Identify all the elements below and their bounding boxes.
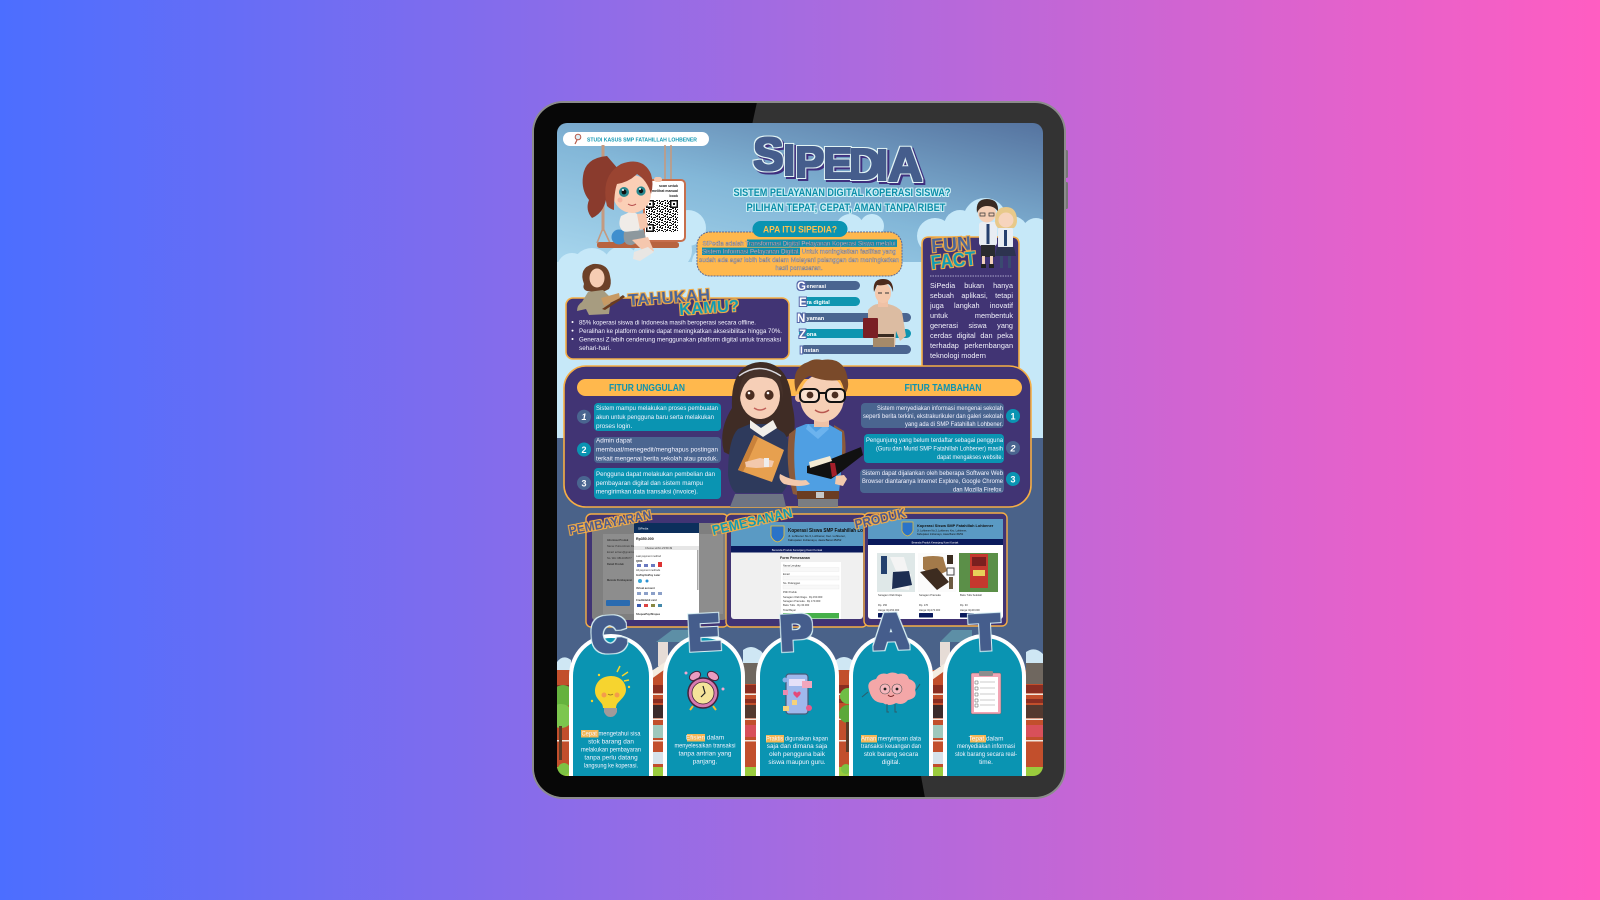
bullet list: Peralihan ke platform online dapat meningkatkan aksesibilitas hingga 70%. — [579, 328, 782, 335]
left feature 2: membuat/menegedit/menghapus postingan — [596, 446, 718, 453]
panel: apa itu sipedia: hasil pemasaran. — [775, 265, 823, 272]
title: SiPedia: S — [753, 128, 784, 180]
right feature 3: 3 — [1010, 474, 1016, 484]
list: GENZI bars: ra digital — [806, 300, 830, 306]
product: buku tulis: Harga: Rp30.000 — [960, 608, 980, 612]
payment modal — [634, 523, 699, 620]
panel: fun fact — [922, 199, 1019, 372]
screenshot panel: pemesanan: Buku Tulis · Rp 30.000 — [783, 603, 810, 607]
icon: alarm clock — [684, 670, 724, 710]
product: buku tulis: Rp. 30 — [960, 603, 968, 607]
illustration: girl on swing with QR board: scan untuk — [659, 184, 678, 188]
card text: digital. — [882, 759, 900, 766]
letter T: T — [969, 606, 1001, 661]
payment modal: Virtual account — [636, 586, 655, 590]
card text: Efisien dalam — [686, 734, 724, 742]
card text: tanpa perlu datang — [584, 754, 638, 762]
product: seragam pramuka: Seragam Pramuka — [919, 593, 941, 597]
screenshot panel: pembayaran: Email: azzam@gmail.com — [607, 550, 637, 554]
left feature 3: pembayaran digital dan sistem mampu — [596, 480, 703, 487]
product: seragam pramuka: Harga: Rp170.000 — [919, 608, 941, 612]
title: SiPedia: D — [849, 140, 881, 189]
product: seragam olah raga: Rp. 150 — [878, 603, 888, 607]
card text: time. — [979, 759, 993, 766]
card text: stok barang secara real- — [955, 751, 1017, 758]
card text — [581, 730, 641, 770]
subtitle: PILIHAN TEPAT, CEPAT, AMAN TANPA RIBET — [746, 202, 946, 214]
card text: Praktis digunakan kapan — [766, 736, 828, 742]
left feature 1 — [577, 403, 721, 431]
right feature 1: yang ada di SMP Fatahillah Lohbener. — [905, 421, 1003, 428]
left feature 2: terkait mengenai berita sekolah atau produk. — [596, 455, 718, 462]
right feature 3: dan Mozilla Firefox. — [953, 486, 1003, 493]
screenshot panel: produk: Jl. Lohbener No.3, Lohbener, Kec. Lohbener, — [917, 530, 967, 532]
body text: untuk membentuk — [930, 310, 1013, 320]
logo — [771, 526, 784, 542]
card text: menyediakan informasi — [957, 743, 1015, 750]
screenshot panel: pembayaran: Nama: Putra Azzam Raihan — [607, 544, 640, 548]
right feature 2: (Guru dan Murid SMP Fatahillah Lohbener) masih — [876, 445, 1003, 452]
badge: studi kasus: STUDI KASUS SMP FATAHILLAH LOHBENER — [587, 137, 697, 143]
panel: apa itu sipedia: sudah ada agar lebih baik dalam Melayani pelanggan dan meningkatkan — [699, 257, 900, 264]
bullet list: 85% koperasi siswa di Indonesia masih beroperasi secara offline. — [579, 319, 756, 326]
panel: tahukah kamu — [566, 264, 789, 359]
poster screen — [549, 123, 1050, 790]
heading bar — [577, 379, 1022, 396]
right feature 3: Browser diantaranya Internet Explore, Google Chrome — [862, 478, 1003, 485]
screenshot panel: pemesanan: Jl. Lohbener No.3, Lohbener, Kec. Lohbener, — [788, 534, 846, 538]
illustration: two students — [977, 199, 1017, 268]
list: GENZI bars: nstan — [804, 348, 820, 354]
card text: stok barang secara — [864, 751, 919, 758]
card text — [766, 735, 828, 766]
label: produk: PRODUK — [853, 505, 908, 532]
screenshot panel: pemesanan: Form Pemesanan — [780, 556, 810, 560]
card text — [861, 735, 921, 766]
screenshot panel: pemesanan: Email — [783, 572, 790, 576]
heading: tahukah kamu — [626, 288, 740, 316]
screenshot panel: pemesanan: Total Bayar — [783, 608, 796, 612]
screenshot panel: produk: Beranda Produk Keranjang Kami Kontak — [912, 540, 959, 544]
card text: menyelesaikan transaksi — [674, 742, 736, 750]
letter C: C — [590, 608, 628, 663]
illustration: man with red book — [863, 279, 906, 347]
card C: cepat — [569, 608, 653, 790]
body text: terhadap perkembangan — [930, 340, 1013, 350]
screenshot panel: pembayaran: Informasi Produk — [607, 538, 629, 542]
illustration: boy student with book — [780, 359, 863, 507]
card text: langsung ke koperasi. — [584, 762, 638, 770]
bullet list: Generasi Z lebih cenderung menggunakan platform digital untuk transaksi — [579, 336, 781, 343]
heading pill — [752, 221, 848, 237]
card text: melakukan pembayaran — [581, 746, 641, 754]
right feature 1: Sistem menyediakan informasi mengenai sekolah — [877, 405, 1003, 412]
payment modal: Credit/debit card — [636, 598, 657, 602]
illustration: girl student with folder — [722, 362, 795, 507]
title: SiPedia: E — [823, 139, 852, 188]
heading: tahukah kamu: TAHUKAH — [628, 285, 711, 310]
list: GENZI bars: ona — [806, 332, 817, 338]
right feature 1 — [861, 403, 1020, 428]
body text — [930, 280, 1013, 362]
payment modal: Last payment method — [636, 554, 662, 558]
icon: phone — [782, 674, 812, 714]
heading pill: APA ITU SIPEDIA? — [763, 224, 837, 234]
letter E: E — [687, 606, 721, 661]
left feature 2: 2 — [581, 445, 587, 455]
card P: praktis — [756, 606, 839, 790]
right feature 2: 2 — [1009, 443, 1016, 453]
title: SiPedia: I — [783, 136, 795, 185]
screenshot panel: pemesanan — [726, 514, 867, 627]
left feature 1: 1 — [581, 412, 587, 422]
illustration: girl on swing with QR board: melihat manual — [652, 189, 678, 193]
card text: Cepat mengetahui sisa — [582, 730, 641, 738]
panel: apa itu sipedia: Sistem Informasi Pelayanan Digital. Untuk meningkatkan fasilitas yang — [702, 248, 897, 255]
screenshot panel: pembayaran — [586, 514, 728, 627]
screenshot panel: produk: Koperasi Siswa SMP Fatahillah Lohbener — [917, 523, 994, 528]
qr code — [646, 200, 678, 232]
payment modal: All payment methods — [636, 568, 661, 572]
right feature 2: dapat mengakses website. — [937, 454, 1003, 461]
body text: sebuah aplikasi, tetapi — [930, 290, 1013, 300]
card text: oleh pengguna baik — [769, 751, 826, 758]
card text — [674, 734, 736, 766]
heading: fun fact — [930, 235, 976, 270]
screenshot panel: pembayaran: Detail Produk — [607, 562, 624, 566]
heading: tahukah kamu: KAMU? — [679, 296, 740, 319]
right feature 3 — [860, 469, 1020, 493]
list: GENZI bars — [797, 281, 911, 357]
product: seragam olah raga: Seragam Olah Raga — [878, 593, 902, 597]
panel: fitur — [564, 366, 1031, 507]
card T: tepat — [943, 606, 1026, 790]
icon: brain — [862, 672, 920, 712]
letter A: A — [873, 605, 909, 660]
screenshot panel: pemesanan: Koperasi Siswa SMP Fatahillah Lo — [788, 528, 863, 534]
body text: cerdas digital dan peka — [930, 330, 1013, 340]
illustration: girl on swing with QR board: book — [669, 194, 678, 198]
heading: fun fact: FUN — [930, 234, 972, 257]
right feature 2 — [864, 434, 1020, 463]
left feature 1: akun untuk pengguna baru serta melakukan — [596, 414, 714, 421]
screenshot panel: pemesanan: Pilih Produk — [783, 590, 798, 594]
sky background — [557, 123, 1043, 262]
icon: light bulb — [591, 666, 630, 717]
panel: apa itu sipedia: SiPedia adalah Transformasi Digital Pelayanan Koperasi Siswa melalui — [702, 240, 896, 247]
screenshot panel: produk — [864, 513, 1007, 626]
right feature 1: seperti berita terkini, ekstrakurikuler dan galeri sekolah — [863, 413, 1003, 420]
product: buku tulis: Buku Tulis Sekolah — [960, 593, 983, 597]
card text: Tepat dalam — [969, 736, 1003, 742]
payment modal: GoPay/GoPay Later — [636, 573, 660, 577]
list: GENZI bars: yaman — [806, 316, 825, 322]
list: GENZI bars: enerasi — [806, 284, 827, 290]
body text: teknologi modern — [930, 350, 986, 360]
icon: magnifier — [575, 134, 581, 144]
logo — [902, 522, 913, 536]
scenery: school buildings, trees and grass — [549, 630, 1043, 776]
screenshot panel: pemesanan: Nama Lengkap — [783, 564, 801, 568]
left feature 2 — [577, 437, 721, 463]
body text: juga langkah inovatif — [930, 300, 1013, 310]
right feature 2: Pengunjung yang belum terdaftar sebagai pengguna — [866, 437, 1003, 444]
left feature 3 — [577, 468, 721, 499]
label: pembayaran: PEMBAYARAN — [567, 507, 653, 538]
title: SiPedia: I — [876, 141, 888, 190]
screenshot panel: pemesanan: No. Pelanggan — [783, 581, 801, 585]
left feature 3: Pengguna dapat melakukan pembelian dan — [596, 471, 715, 478]
illustration: girl on swing with QR board — [583, 145, 685, 261]
left feature 1: Sistem mampu melakukan proses pembuatan — [596, 405, 718, 412]
left feature 2: Admin dapat — [596, 437, 632, 444]
screenshot panel: pembayaran: Metode Pembayaran — [607, 578, 633, 582]
screenshot panel: pemesanan: Seragam Pramuka · Rp 170.000 — [783, 599, 821, 603]
heading bar: FITUR UNGGULAN — [609, 383, 685, 394]
badge: studi kasus — [563, 132, 709, 146]
payment modal: ShopeePay/Shopee — [636, 612, 661, 616]
card text: Aman menyimpan data — [861, 736, 921, 742]
product: seragam olah raga: Harga: Rp150.000 — [878, 608, 900, 612]
subtitle: SISTEM PELAYANAN DIGITAL KOPERASI SISWA? — [734, 187, 950, 199]
card text: siswa maupun guru. — [768, 759, 826, 766]
card text: tanpa antrian yang — [679, 750, 732, 758]
list: GENZI bars: Z — [799, 329, 806, 341]
label: pemesanan: PEMESANAN — [710, 504, 794, 538]
list: GENZI bars: I — [800, 346, 803, 357]
list: GENZI bars: E — [799, 297, 807, 309]
bullet list — [572, 319, 782, 352]
clouds and light lower background — [557, 198, 1050, 440]
icon: clipboard — [971, 671, 1001, 714]
product: seragam pramuka: Rp. 170 — [919, 603, 929, 607]
tablet device — [532, 101, 1068, 799]
heading bar: FITUR TAMBAHAN — [904, 383, 982, 394]
subtitle — [734, 187, 950, 214]
right feature 1: 1 — [1010, 411, 1016, 421]
illustration: woman with book — [577, 264, 625, 315]
steel blue lower background — [557, 438, 1043, 678]
letter P: P — [779, 606, 813, 661]
card text: panjang. — [693, 758, 717, 766]
card text: transaksi keuangan dan — [861, 743, 921, 750]
body text: SiPedia bukan hanya — [930, 280, 1013, 290]
title: SiPedia: P — [795, 138, 824, 187]
panel: apa itu sipedia — [697, 221, 902, 276]
payment modal: Choose within 23:59:49 — [645, 546, 673, 550]
screenshot panel: pembayaran: No. WA: 0812345677 — [607, 556, 632, 560]
list: GENZI bars: N — [797, 313, 805, 325]
card text — [955, 735, 1017, 766]
product: seragam olah raga — [877, 553, 915, 618]
card A: aman — [849, 605, 933, 790]
card text: saja dan dimana saja — [767, 743, 828, 750]
card E: efisien — [663, 606, 745, 790]
payment modal: SiPedia — [638, 526, 649, 530]
left feature 3: mengirimkan data transaksi (invoice). — [596, 488, 698, 495]
payment modal: QRIS — [636, 559, 643, 563]
heading: fun fact: FACT — [930, 249, 977, 274]
left feature 1: proses login. — [596, 423, 632, 430]
payment modal: Rp350.000 — [636, 537, 654, 541]
card text: stok barang dan — [588, 738, 634, 746]
body text: generasi siswa yang — [930, 320, 1013, 330]
screenshot panel: produk: Kabupaten Indramayu, Jawa Barat 45252 — [917, 533, 964, 536]
screenshot panel: pemesanan: Beranda Produk Keranjang Kami Kontak — [772, 548, 823, 552]
bullet list: sehari-hari. — [579, 345, 611, 352]
title: SiPedia: A — [888, 139, 923, 192]
product: seragam pramuka — [918, 553, 956, 618]
screenshot panel: pemesanan: Kabupaten Indramayu, Jawa Barat 45252 — [788, 538, 842, 542]
list: GENZI bars: G — [797, 281, 806, 293]
right feature 3: Sistem dapat dijalankan oleh beberapa Software Web — [862, 470, 1003, 477]
left feature 3: 3 — [581, 478, 587, 488]
screenshot panel: pemesanan: Seragam Olah Raga · Rp 150.000 — [783, 595, 823, 599]
product: buku tulis — [959, 553, 998, 618]
